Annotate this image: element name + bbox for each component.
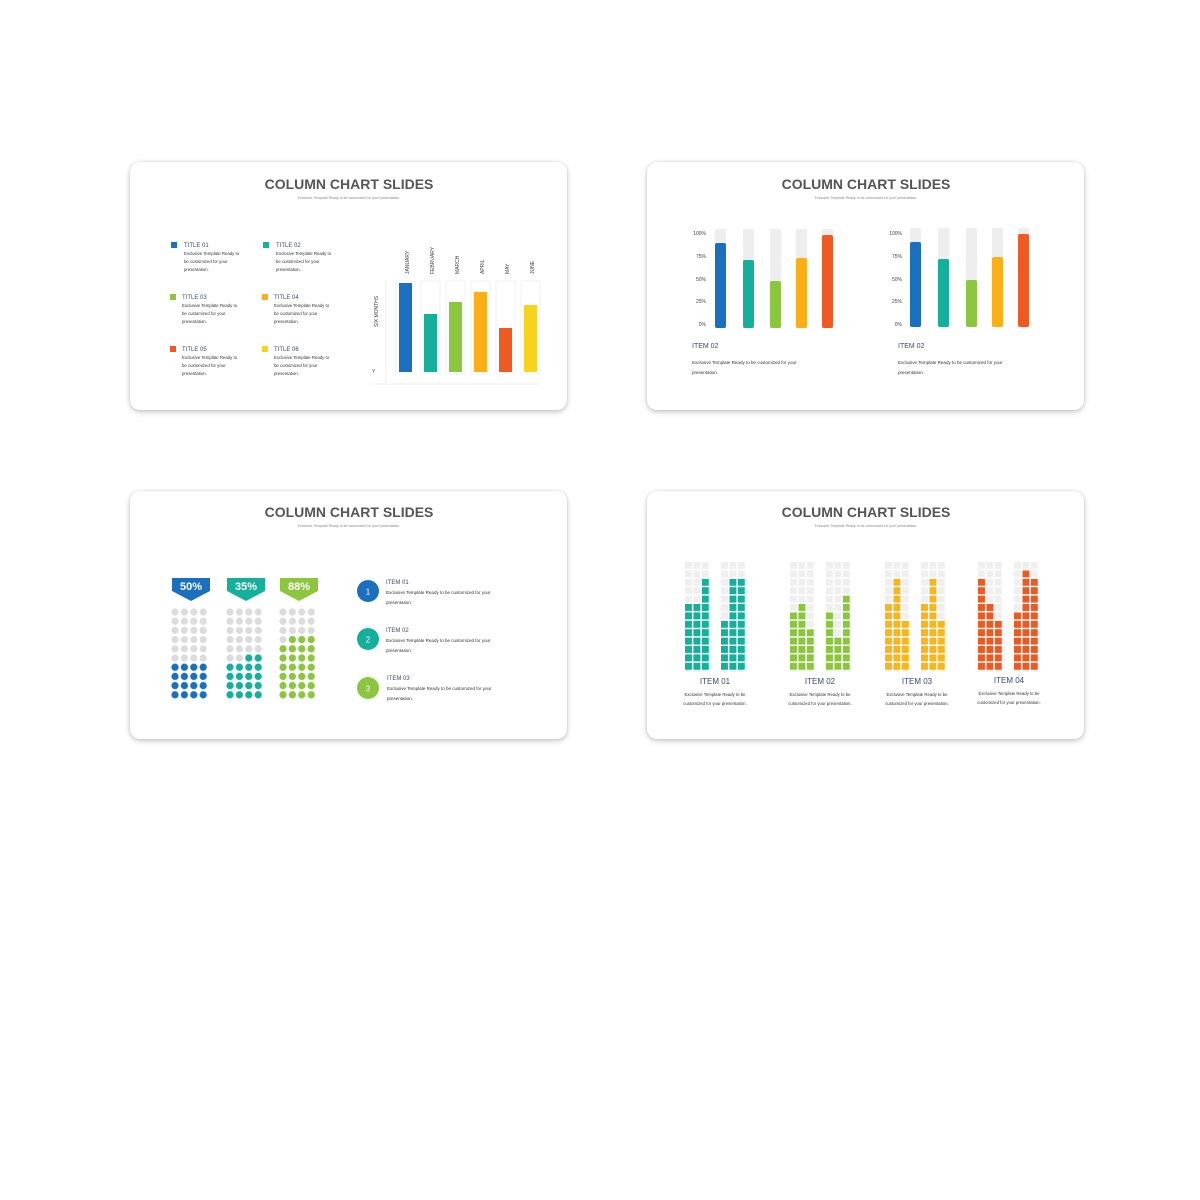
list: item 01: 1 [366,588,371,596]
bar chart: six months: FEBRUARY [430,246,436,274]
chart: left: 25% [696,299,707,305]
chart: left [693,229,833,328]
list: item 03: 3 [366,684,371,694]
title [782,176,950,200]
bar chart: six months: JUNE [530,260,536,274]
block chart: item 04 [978,562,1039,671]
dot column: green [279,608,317,700]
labels: items: Exclusive Template Ready to be [886,692,948,697]
dot column: blue [171,608,209,700]
flag: 88% [280,578,318,601]
list: item 02 [357,628,491,653]
legend: presentation. [274,319,299,324]
title [265,504,433,528]
labels: items: customized for your presentation. [977,700,1041,705]
bar chart: six months: MARCH [455,255,461,274]
labels: items: ITEM 03 [902,677,933,686]
title: Exclusive Template Ready to be customized for your presentation. [298,196,400,200]
legend: presentation. [276,267,301,272]
list: item 03 [357,676,492,701]
list: item 02: presentation. [386,648,412,653]
list: item 01: ITEM 01 [386,580,409,586]
legend: presentation. [184,267,209,272]
legend: Exclusive Template Ready to [184,251,240,256]
labels: items: customized for your presentation. [788,701,852,706]
flag: 50% [172,578,210,601]
flag: 50%: 50% [180,581,202,593]
title: Exclusive Template Ready to be customized for your presentation. [815,196,917,200]
title: COLUMN CHART SLIDES [782,504,950,520]
legend: Exclusive Template Ready to [182,355,238,360]
legend: presentation. [182,319,207,324]
panel: slide 2 percentage columns [647,162,1084,410]
chart: left: 50% [696,277,707,283]
flag: 88%: 88% [288,581,310,593]
legend: TITLE 02 [276,243,301,249]
legend: presentation. [182,371,207,376]
list: item 03: presentation. [387,696,413,701]
text: item right: Exclusive Template Ready to be customized for your [898,360,1003,365]
title: COLUMN CHART SLIDES [782,176,950,192]
legend: presentation. [274,371,299,376]
labels: items: Exclusive Template Ready to be [684,692,746,697]
title: Exclusive Template Ready to be customized for your presentation. [298,524,400,528]
list: item 02: ITEM 02 [386,628,409,634]
title [782,504,950,528]
bar chart: six months: Y [372,369,376,375]
legend: Exclusive Template Ready to [274,355,330,360]
list: item 02: Exclusive Template Ready to be customized for your [386,638,491,643]
legend: TITLE 05 [182,347,207,353]
list: item 01: Exclusive Template Ready to be customized for your [386,590,491,595]
legend: TITLE 01 [184,243,209,249]
labels: items: customized for your presentation. [885,701,949,706]
title: Exclusive Template Ready to be customized for your presentation. [815,524,917,528]
panel: slide 4 block columns [647,491,1084,739]
list: item 03: ITEM 03 [387,676,410,682]
list: item 03: Exclusive Template Ready to be customized for your [387,686,492,691]
panel: slide 1 legend and monthly columns [130,162,567,410]
legend: be customized for your [182,311,226,316]
flag: 35%: 35% [235,581,257,593]
block chart: item 02 [790,562,851,671]
chart: right: 75% [892,254,903,260]
chart: left: 100% [693,231,707,237]
legend [170,242,332,376]
list: item 02: 2 [366,636,371,644]
block chart: item 03 [885,562,946,671]
dot column: teal [226,608,264,700]
bar chart: six months [370,246,540,384]
text: item left [692,343,797,375]
legend: Exclusive Template Ready to [276,251,332,256]
bar chart: six months: JANUARY [405,250,411,274]
legend: Exclusive Template Ready to [274,303,330,308]
chart: left: 75% [696,254,707,260]
text: item left: Exclusive Template Ready to be customized for your [692,360,797,365]
list: item 01 [357,580,491,605]
labels: items [683,676,1041,706]
labels: items: Exclusive Template Ready to be [978,691,1040,696]
labels: items: Exclusive Template Ready to be [789,692,851,697]
text: item right: presentation. [898,370,924,375]
title [265,176,433,200]
chart: right [889,228,1029,328]
legend: be customized for your [182,363,226,368]
chart: right: 100% [889,231,903,237]
legend: TITLE 03 [182,295,207,301]
labels: items: ITEM 01 [700,677,731,686]
text: item right: ITEM 02 [898,343,925,350]
text: item right [898,343,1003,375]
legend: TITLE 04 [274,295,299,301]
chart: right: 50% [892,277,903,283]
labels: items: ITEM 02 [805,677,836,686]
bar chart: six months: SIX MONTHS [374,295,380,327]
legend: TITLE 06 [274,347,299,353]
bar chart: six months: APRIL [480,259,486,274]
panel: slide 3 dot columns [130,491,567,739]
chart: right: 0% [895,322,903,328]
text: item left: presentation. [692,370,718,375]
labels: items: ITEM 04 [994,676,1025,685]
chart: right: 25% [892,299,903,305]
bar chart: six months: MAY [505,263,511,274]
labels: items: customized for your presentation. [683,701,747,706]
text: item left: ITEM 02 [692,343,719,350]
chart: left: 0% [699,322,707,328]
title: COLUMN CHART SLIDES [265,176,433,192]
block chart: item 01 [685,562,746,671]
legend: be customized for your [274,311,318,316]
legend: be customized for your [276,259,320,264]
title: COLUMN CHART SLIDES [265,504,433,520]
flag: 35% [227,578,265,601]
legend: be customized for your [184,259,228,264]
legend: Exclusive Template Ready to [182,303,238,308]
list: item 01: presentation. [386,600,412,605]
legend: be customized for your [274,363,318,368]
